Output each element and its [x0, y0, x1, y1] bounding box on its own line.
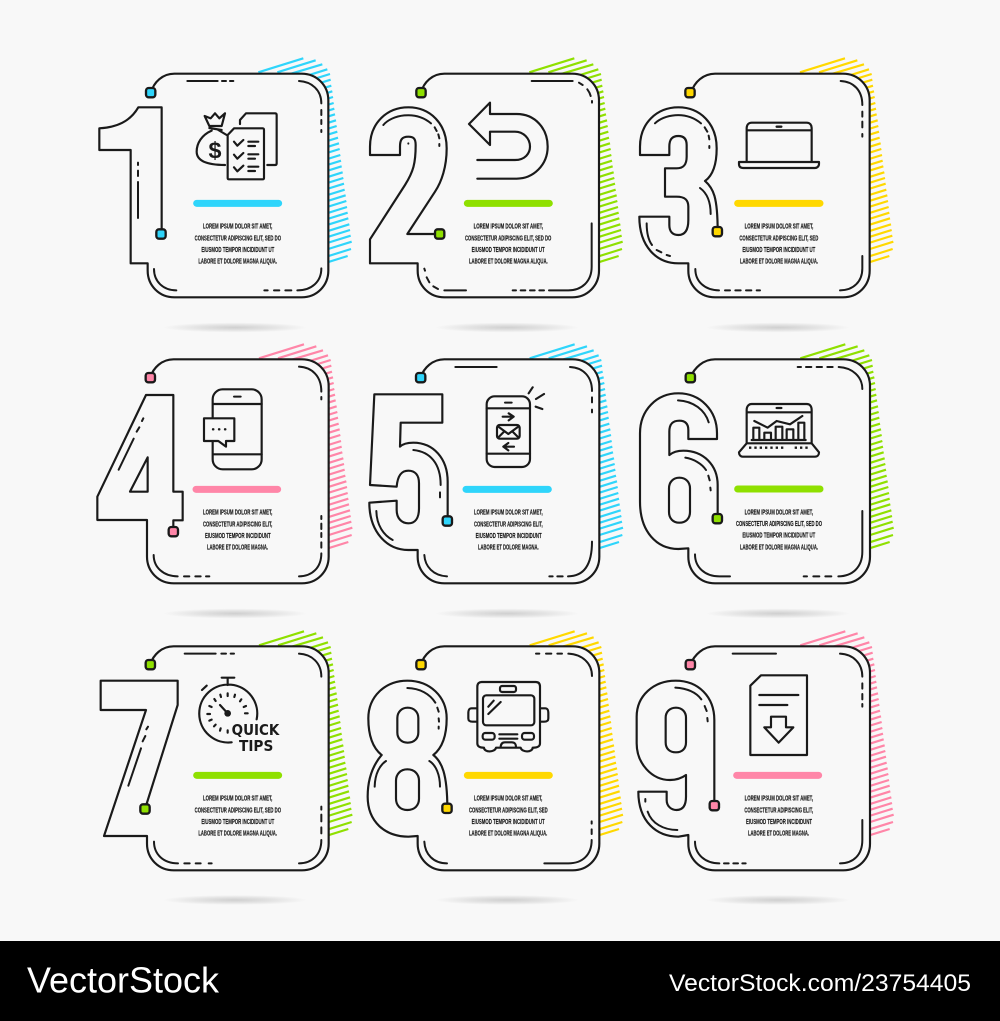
text block: LOREM IPSUM DOLOR SIT AMET, — [474, 796, 542, 803]
text block — [465, 224, 552, 266]
panel 2 — [370, 58, 623, 297]
yellow stripes — [800, 58, 893, 264]
number 4 outline and frame — [97, 359, 329, 583]
icon: undo arrow — [469, 103, 548, 179]
number 1 outline and frame — [99, 74, 328, 297]
text block: LOREM IPSUM DOLOR SIT AMET, — [474, 510, 543, 517]
text block: EIUSMOD TEMPOR INCIDIDUNT — [476, 533, 542, 540]
text block: CONSECTETUR ADIPISCING ELIT, SED DO — [195, 235, 281, 242]
text block: CONSECTETUR ADIPISCING ELIT, SED — [739, 235, 818, 242]
text block: EIUSMOD TEMPOR INCIDIDUNT UT — [742, 533, 816, 540]
text block: LABORE ET DOLORE MAGNA ALIQUA. — [469, 259, 548, 266]
blue stripes — [530, 344, 623, 550]
text block: LABORE ET DOLORE MAGNA ALIQUA. — [740, 259, 818, 266]
icon: money bag and checklist: $ — [209, 138, 222, 164]
text block: EIUSMOD TEMPOR INCIDIDUNT UT — [472, 819, 545, 826]
text block: EIUSMOD TEMPOR INCIDIDUNT UT — [742, 247, 816, 254]
icon: bus — [468, 682, 548, 751]
text block: CONSECTETUR ADIPISCING ELIT, — [474, 521, 543, 528]
text block: LABORE ET DOLORE MAGNA ALIQUA. — [740, 544, 818, 551]
number 3 outline and frame — [639, 74, 870, 297]
panel 6 — [640, 344, 894, 583]
icon: quick tips timer — [199, 678, 280, 755]
connector dots — [146, 88, 166, 239]
text block — [474, 510, 543, 552]
accent bar — [197, 765, 279, 786]
icon: phone with envelope — [487, 387, 544, 467]
floor shadows — [163, 322, 850, 905]
icon: money bag and checklist — [197, 113, 277, 179]
icon: quick tips timer: TIPS — [239, 737, 273, 755]
connector dots — [686, 660, 719, 810]
connector dots — [416, 373, 452, 526]
footer url: VectorStock.com/23754405 — [669, 970, 971, 997]
text block: CONSECTETUR ADIPISCING ELIT, SED DO — [465, 235, 552, 242]
text block: LABORE ET DOLORE MAGNA. — [478, 545, 539, 552]
text block: LOREM IPSUM DOLOR SIT AMET, — [745, 224, 813, 231]
text block — [736, 509, 822, 551]
panel 8 — [368, 631, 623, 870]
icon: document download — [750, 675, 807, 755]
text block: LOREM IPSUM DOLOR SIT AMET, — [745, 796, 813, 803]
text block — [739, 224, 818, 266]
pink stripes — [259, 344, 352, 550]
panel 1 — [99, 58, 352, 297]
icon: laptop with analytics chart — [739, 404, 819, 457]
accent bar — [738, 478, 820, 499]
green stripes — [259, 631, 352, 837]
accent bar — [466, 479, 548, 500]
text block: LOREM IPSUM DOLOR SIT AMET, — [203, 510, 272, 517]
icon: phone with chat bubble — [204, 389, 262, 469]
number 7 outline and frame — [101, 646, 329, 870]
panel 3 — [639, 58, 893, 297]
connector dots — [686, 373, 722, 523]
text block: EIUSMOD TEMPOR INCIDIDUNT UT — [472, 247, 545, 254]
blue stripes — [258, 58, 352, 264]
connector dots — [416, 660, 452, 813]
text block: LOREM IPSUM DOLOR SIT AMET, — [203, 224, 272, 231]
text block: CONSECTETUR ADIPISCING ELIT, SED DO — [736, 521, 822, 528]
accent bar — [737, 765, 819, 786]
connector dots — [685, 88, 722, 236]
text block: CONSECTETUR ADIPISCING ELIT, SED DO — [195, 807, 281, 814]
panel 9 — [637, 631, 894, 870]
icon: quick tips timer: QUICK — [232, 721, 280, 739]
text block — [195, 224, 281, 266]
text block — [195, 796, 281, 838]
accent bar — [467, 765, 549, 786]
number 8 outline and frame — [368, 646, 599, 870]
accent bar — [196, 479, 278, 500]
connector dots — [140, 660, 155, 814]
text block: LABORE ET DOLORE MAGNA ALIQUA. — [469, 831, 547, 838]
footer logo: VectorStock — [27, 960, 220, 1000]
panel 4 — [97, 344, 352, 583]
text block: CONSECTETUR ADIPISCING ELIT, — [744, 807, 813, 814]
text block: LOREM IPSUM DOLOR SIT AMET, — [745, 509, 813, 516]
green stripes — [800, 344, 894, 550]
accent bar — [467, 193, 549, 214]
text block — [469, 796, 548, 838]
number 5 outline and frame — [369, 359, 599, 583]
number 6 outline and frame — [640, 359, 870, 583]
text block: LABORE ET DOLORE MAGNA. — [207, 545, 268, 552]
text block: EIUSMOD TEMPOR INCIDIDUNT — [746, 819, 812, 826]
text block: CONSECTETUR ADIPISCING ELIT, — [203, 521, 272, 528]
green stripes — [529, 58, 623, 264]
yellow stripes — [530, 631, 623, 837]
text block: LABORE ET DOLORE MAGNA. — [748, 831, 809, 838]
text block: LABORE ET DOLORE MAGNA ALIQUA. — [198, 259, 277, 266]
connector dots — [146, 373, 178, 536]
text block — [744, 796, 813, 838]
text block: EIUSMOD TEMPOR INCIDIDUNT UT — [201, 819, 275, 826]
text block: EIUSMOD TEMPOR INCIDIDUNT — [205, 533, 271, 540]
text block — [203, 510, 272, 552]
connector dots — [416, 88, 444, 239]
number 2 outline and frame — [370, 74, 599, 297]
icon: laptop — [739, 123, 819, 168]
text block: LOREM IPSUM DOLOR SIT AMET, — [203, 796, 272, 803]
footer bar — [0, 941, 1000, 1021]
number 9 outline and frame — [637, 646, 870, 870]
panel 7 — [101, 631, 352, 870]
text block: LABORE ET DOLORE MAGNA ALIQUA. — [198, 831, 277, 838]
accent bar — [197, 193, 279, 214]
accent bar — [738, 193, 820, 214]
text block: CONSECTETUR ADIPISCING ELIT, SED — [469, 807, 548, 814]
text block: EIUSMOD TEMPOR INCIDIDUNT UT — [201, 247, 275, 254]
text block: LOREM IPSUM DOLOR SIT AMET, — [474, 224, 543, 231]
pink stripes — [800, 631, 894, 837]
panel 5 — [369, 344, 623, 583]
